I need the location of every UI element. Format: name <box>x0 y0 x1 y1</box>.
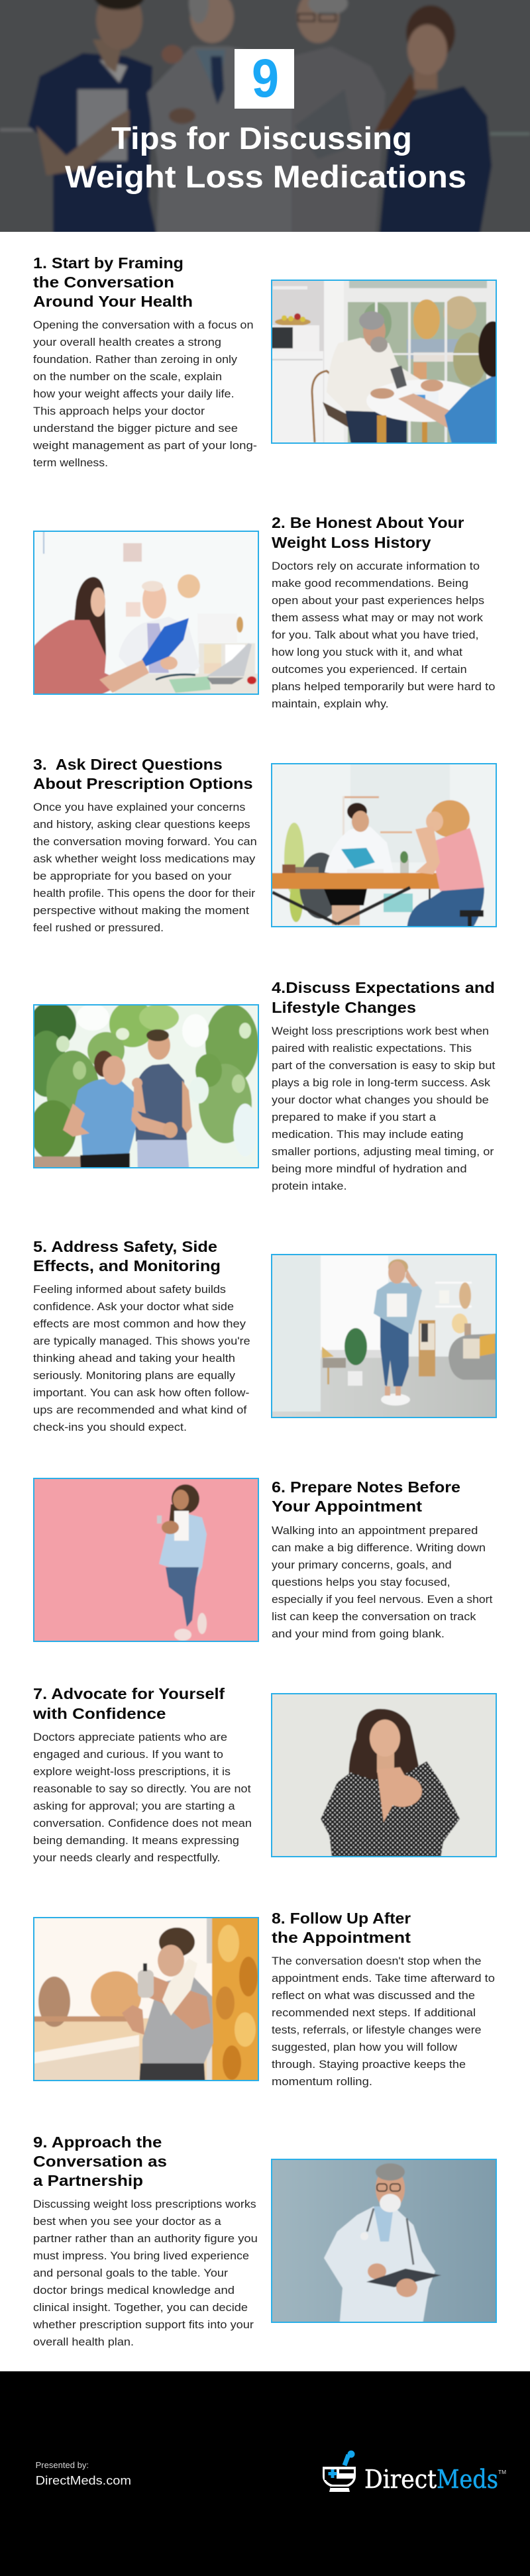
text block: tip 5: thinking ahead and taking your health <box>33 1352 235 1365</box>
text block: tip 8: recommended next steps. If additional <box>272 2006 476 2019</box>
text block: tip 2: make good recommendations. Being <box>272 577 468 590</box>
text block: tip 2: maintain, explain why. <box>272 697 389 710</box>
heading: tip 1 <box>33 254 193 310</box>
text block: tip 4: smaller portions, adjusting meal timing, or <box>272 1145 494 1158</box>
text block: tip 7 <box>33 1731 252 1864</box>
text block: tip 3: feel rushed or pressured. <box>33 921 164 934</box>
number badge <box>235 48 294 109</box>
text block: tip 4: your doctor what changes you should be <box>272 1094 489 1106</box>
header photo: medical team <box>0 0 530 252</box>
panel: tip 8 <box>28 1910 495 2088</box>
text block: tip 8 <box>272 1955 495 2088</box>
text block: tip 1: understand the bigger picture and see <box>33 422 238 435</box>
presented by text: Presented by: <box>36 2460 89 2470</box>
photo: woman checking phone on pink background <box>33 1478 259 1642</box>
text block: tip 5 <box>33 1283 250 1433</box>
heading: tip 6: 6. Prepare Notes Before <box>272 1478 460 1496</box>
text block: tip 1: on the number on the scale, explain <box>33 370 222 383</box>
heading: tip 1: the Conversation <box>33 274 174 291</box>
text block: tip 7: engaged and curious. If you want to <box>33 1748 223 1761</box>
text block: tip 2: Doctors rely on accurate information to <box>272 560 480 572</box>
heading: tip 5: 5. Address Safety, Side <box>33 1238 217 1255</box>
text block: tip 5: confidence. Ask your doctor what side <box>33 1300 234 1313</box>
text block: tip 6: can make a big difference. Writing down <box>272 1541 486 1554</box>
text block: tip 9: clinical insight. Together, you can decide <box>33 2301 248 2314</box>
photo: couple jogging outdoors <box>33 1004 259 1168</box>
heading: tip 8: 8. Follow Up After <box>272 1910 411 1927</box>
heading: tip 4: 4.Discuss Expectations and <box>272 979 495 996</box>
panel: tip 3 <box>33 756 502 934</box>
text block: tip 1: weight management as part of your long- <box>32 439 257 452</box>
heading: tip 8: the Appointment <box>272 1929 411 1946</box>
heading: tip 3: 3. Ask Direct Questions <box>33 756 223 773</box>
icon: mortar and pestle <box>323 2451 356 2492</box>
heading: tip 7 <box>32 1685 225 1722</box>
panel: tip 6 <box>28 1472 493 1647</box>
text block: tip 6: your primary concerns, goals, and <box>272 1559 452 1571</box>
text block: tip 1 <box>32 319 257 469</box>
heading: tip 2: Weight Loss History <box>272 534 431 551</box>
heading: tip 3 <box>33 756 253 792</box>
text block: tip 6: and your mind from going blank. <box>272 1627 445 1640</box>
text block: tip 8: The conversation doesn't stop when the <box>272 1955 481 1967</box>
header panel <box>0 0 530 252</box>
heading: tip 7: with Confidence <box>32 1705 166 1722</box>
photo: doctor and patient at desk <box>271 763 497 927</box>
text block: tip 5: are typically managed. This shows you're <box>33 1335 250 1347</box>
text block: tip 6: especially if you feel nervous. Even a short <box>272 1593 493 1606</box>
text block: tip 4: plays a big role in long-term success. Ask <box>272 1076 491 1089</box>
heading: tip 1: Around Your Health <box>33 293 193 310</box>
text block: tip 1: foundation. Rather than zeroing in only <box>33 353 238 366</box>
photo: smiling woman in polka dot dress <box>271 1693 497 1857</box>
text block: tip 2: outcomes you experienced. If certain <box>272 663 467 676</box>
heading: tip 1: 1. Start by Framing <box>33 254 184 272</box>
text block: tip 2: them assess what may or may not work <box>272 611 484 624</box>
text block: tip 8: appointment ends. Take time afterward to <box>272 1972 495 1984</box>
text block: tip 4: protein intake. <box>272 1180 347 1192</box>
text block: tip 3: be appropriate for you based on your <box>33 870 232 882</box>
text block: tip 5: check-ins you should expect. <box>33 1421 187 1433</box>
text block: tip 6: questions helps you stay focused, <box>272 1576 450 1588</box>
text block: tip 2: open about your past experiences helps <box>272 594 484 607</box>
heading: tip 2: 2. Be Honest About Your <box>272 514 464 531</box>
text block: tip 6: Walking into an appointment prepared <box>272 1524 478 1537</box>
text block: tip 2: how long you stuck with it, and what <box>272 646 462 658</box>
text block: tip 4: paired with realistic expectations. This <box>272 1042 472 1055</box>
panel: tip 1 <box>32 254 507 469</box>
text block: tip 3: Once you have explained your concerns <box>33 801 245 813</box>
text block: tip 1: This approach helps your doctor <box>33 405 205 417</box>
text block: tip 3: and history, asking clear questions keeps <box>33 818 250 831</box>
text block: tip 7: Doctors appreciate patients who are <box>33 1731 227 1743</box>
text block: tip 1: term wellness. <box>33 456 108 469</box>
text block: tip 9: best when you see your doctor as a <box>33 2215 221 2228</box>
text block: tip 5: effects are most common and how they <box>33 1317 246 1330</box>
text block: tip 8: through. Staying proactive keeps the <box>272 2058 466 2071</box>
title: Weight Loss Medications <box>65 159 466 194</box>
text block: tip 3: the conversation moving forward. You can <box>33 835 257 848</box>
text block: tip 6 <box>272 1524 493 1640</box>
wordmark: Direct <box>364 2465 437 2495</box>
text block: tip 7: conversation. Confidence does not mean <box>33 1817 252 1829</box>
heading: tip 9: 9. Approach the <box>33 2134 162 2151</box>
text block: tip 1: your overall health creates a strong <box>33 336 221 348</box>
heading: tip 9 <box>33 2134 167 2189</box>
text block: tip 8: reflect on what was discussed and the <box>272 1989 475 2002</box>
logo: DirectMeds <box>323 2451 506 2495</box>
heading: tip 4 <box>272 979 495 1016</box>
heading: tip 9: a Partnership <box>33 2172 143 2189</box>
text block: tip 4: being more mindful of hydration and <box>272 1162 467 1175</box>
text block: tip 4: prepared to make if you start a <box>272 1111 437 1123</box>
panel: tip 9 <box>32 2134 502 2348</box>
text block: tip 2 <box>272 560 495 710</box>
text block: tip 9: Discussing weight loss prescriptions works <box>33 2198 256 2210</box>
heading: tip 3: About Prescription Options <box>33 775 253 792</box>
heading: tip 5: Effects, and Monitoring <box>33 1257 221 1274</box>
heading: tip 2 <box>272 514 464 551</box>
text block: tip 7: explore weight-loss prescriptions, it is <box>33 1765 231 1778</box>
presented by text: DirectMeds.com <box>36 2473 131 2487</box>
text block: tip 5: seriously. Monitoring plans are equally <box>33 1369 236 1382</box>
number badge: 9 <box>252 48 279 109</box>
text block: tip 4: medication. This may include eating <box>272 1128 464 1141</box>
title: Tips for Discussing <box>111 121 412 156</box>
text block: tip 9: doctor brings medical knowledge and <box>33 2284 235 2296</box>
text block: tip 6: list can keep the conversation on track <box>272 1610 476 1623</box>
panel: tip 5 <box>33 1238 502 1433</box>
text block: tip 3: ask whether weight loss medications may <box>33 852 256 865</box>
heading: tip 5 <box>33 1238 221 1274</box>
text block: tip 9: whether prescription support fits into your <box>32 2318 254 2331</box>
text block: tip 5: Feeling informed about safety builds <box>33 1283 226 1296</box>
text block: tip 8: suggested, plan how you will follow <box>272 2041 458 2053</box>
text block: tip 7: reasonable to say so directly. You are not <box>33 1782 251 1795</box>
text block: tip 9: overall health plan. <box>33 2336 134 2348</box>
text block: tip 8: tests, referrals, or lifestyle changes were <box>272 2024 481 2036</box>
text block: tip 4 <box>272 1025 496 1192</box>
text block: tip 1: Opening the conversation with a focus on <box>33 319 254 331</box>
text block: tip 7: asking for approval; you are starting a <box>33 1800 235 1812</box>
photo: man drinking water in autumn park <box>33 1917 259 2081</box>
text block: tip 2: plans helped temporarily but were hard to <box>272 680 495 693</box>
text block: tip 3: health profile. This opens the door for their <box>33 887 256 900</box>
text block: tip 9: and personal goals to the table. Your <box>33 2267 228 2279</box>
text block: tip 5: important. You can ask how often follow- <box>33 1386 249 1399</box>
text block: tip 9: must impress. You bring lived experience <box>33 2249 249 2262</box>
panel: tip 2 <box>28 514 495 710</box>
heading: tip 8 <box>272 1910 411 1946</box>
photo: doctor with clipboard <box>271 2159 497 2323</box>
text block: tip 5: ups are recommended and what kind of <box>33 1404 247 1416</box>
photo: woman and doctor with clipboard <box>33 531 259 695</box>
text block: tip 3: perspective without making the moment <box>33 904 249 917</box>
text block: tip 1: how your weight affects your daily life. <box>33 387 235 400</box>
text block: tip 8: momentum rolling. <box>272 2075 372 2088</box>
heading: tip 9: Conversation as <box>33 2153 167 2170</box>
text block: tip 9 <box>32 2198 258 2348</box>
heading: tip 6 <box>272 1478 460 1515</box>
heading: tip 4: Lifestyle Changes <box>272 999 416 1016</box>
text block: tip 3 <box>33 801 257 934</box>
photo: woman on bathroom scale <box>271 1254 497 1418</box>
text block: tip 4: part of the conversation is easy to skip but <box>272 1059 496 1072</box>
footer panel <box>0 2371 530 2576</box>
text block: tip 7: being demanding. It means expressing <box>33 1834 239 1847</box>
text block: tip 2: for you. Talk about what you have tried, <box>272 629 478 641</box>
heading: tip 6: Your Appointment <box>272 1498 422 1515</box>
photo: patient having blood pressure taken <box>271 280 497 444</box>
title <box>65 121 466 194</box>
text block: tip 4: Weight loss prescriptions work best when <box>272 1025 489 1037</box>
logo: DirectMeds: TM <box>498 2469 506 2475</box>
text block: tip 7: your needs clearly and respectfully. <box>33 1851 221 1864</box>
presented by text <box>36 2460 131 2487</box>
panel: tip 4 <box>26 979 496 1192</box>
heading: tip 7: 7. Advocate for Yourself <box>33 1685 225 1702</box>
panel: tip 7 <box>32 1685 502 1864</box>
logo: DirectMeds: Meds <box>437 2465 498 2495</box>
text block: tip 9: partner rather than an authority figure you <box>33 2232 258 2245</box>
